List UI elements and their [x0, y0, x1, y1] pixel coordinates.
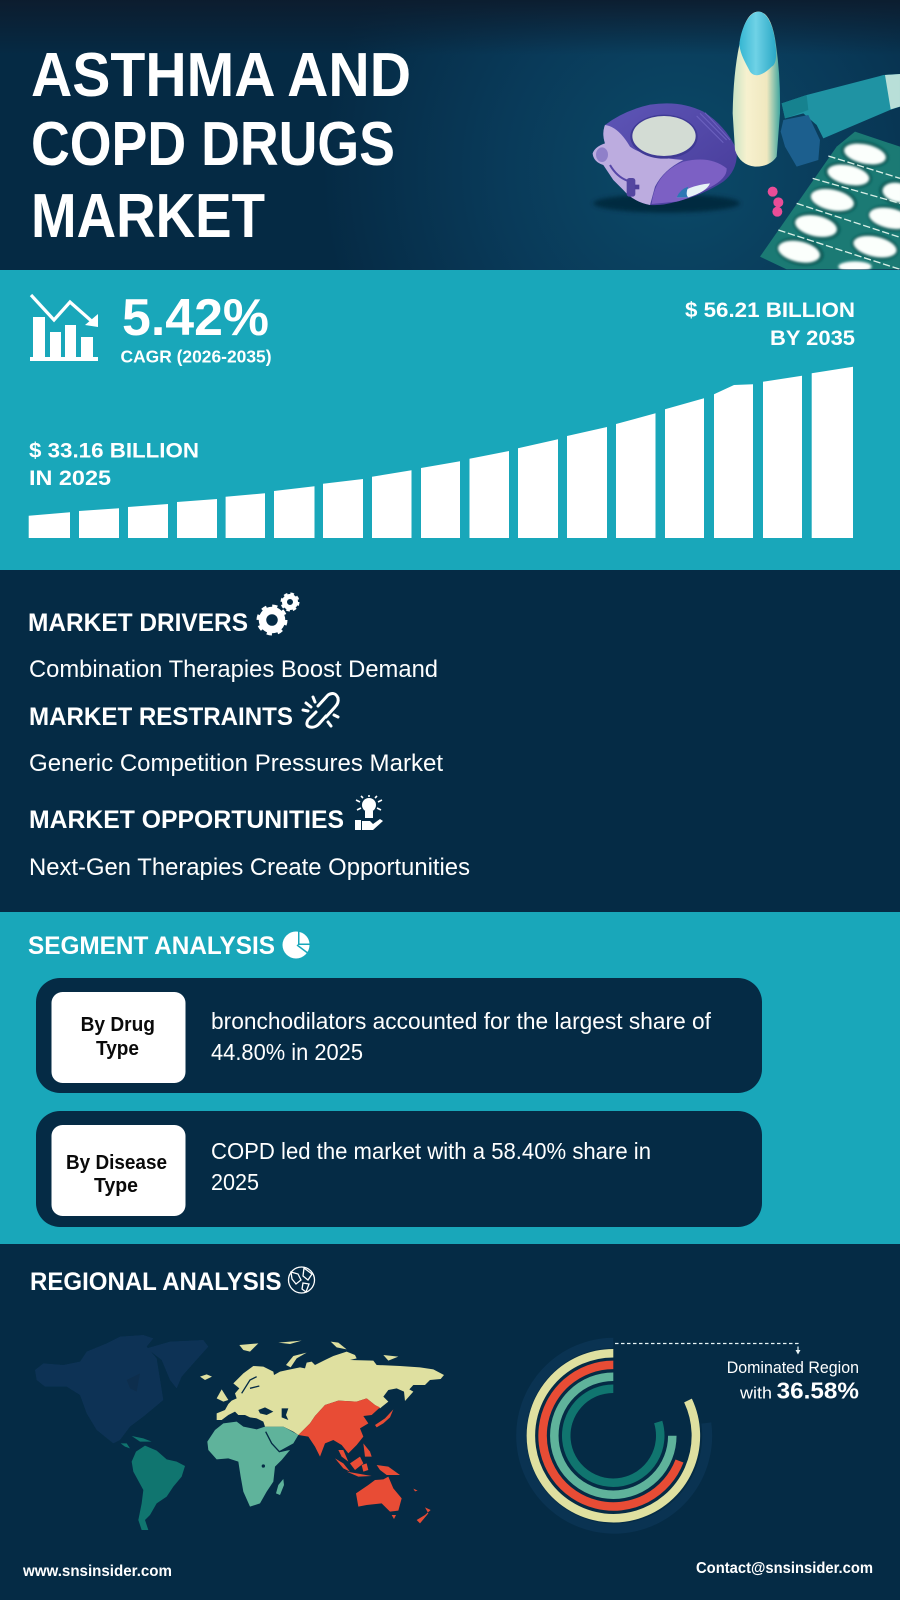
callout: dominated region: Dominated Region	[727, 1359, 859, 1377]
driver text: Combination Therapies Boost Demand	[29, 656, 438, 683]
panel: market size	[0, 270, 900, 570]
yellow arc	[531, 1353, 696, 1518]
restraint text: Generic Competition Pressures Market	[29, 750, 443, 777]
region: europe and russia	[200, 1341, 444, 1435]
region: north america	[35, 1335, 208, 1443]
card: by drug type: 44.80% in 2025	[211, 1039, 363, 1065]
card: by disease type: By Disease	[66, 1152, 167, 1174]
CAGR label: CAGR (2026-2035)	[120, 346, 272, 366]
card: by disease type	[36, 1111, 762, 1227]
teal arc	[566, 1389, 660, 1483]
card: by drug type: bronchodilators accounted for the largest share of	[211, 1008, 712, 1034]
header photo: inhalers and blister pack	[593, 12, 900, 272]
footer: contact: Contact@snsinsider.com	[696, 1560, 873, 1577]
end value: BY 2035	[770, 326, 855, 350]
title: MARKET	[31, 182, 265, 251]
radial chart	[521, 1343, 707, 1529]
CAGR value: 5.42%	[122, 289, 269, 347]
green arc	[554, 1377, 672, 1495]
icon: pie chart	[282, 931, 310, 958]
red arc	[543, 1365, 680, 1506]
pink pills	[768, 187, 783, 217]
icon: idea in hand	[355, 795, 383, 830]
icon: globe	[288, 1267, 314, 1293]
title	[31, 41, 411, 251]
card: by disease type: 2025	[211, 1169, 259, 1195]
card: by drug type	[36, 978, 762, 1093]
disc inhaler	[593, 103, 740, 213]
end value	[685, 298, 855, 350]
callout: dominated region	[727, 1359, 859, 1404]
start value: $ 33.16 BILLION	[29, 438, 199, 462]
panel: market dynamics	[0, 570, 900, 912]
icon: gears	[258, 594, 298, 634]
heading: market restraints: MARKET RESTRAINTS	[29, 703, 293, 731]
icon: CAGR chart	[30, 295, 98, 361]
start value: IN 2025	[29, 466, 111, 490]
tall inhaler bottle	[733, 12, 780, 167]
icon: broken chain	[303, 694, 338, 727]
start value	[29, 438, 199, 490]
region: southeast asia and oceania	[335, 1443, 431, 1523]
teal metered inhaler	[781, 74, 900, 167]
region: africa and middle east	[207, 1422, 298, 1507]
panel: regional analysis	[0, 1244, 900, 1600]
world map	[35, 1335, 444, 1530]
card: by drug type: Type	[96, 1038, 139, 1060]
title: COPD DRUGS	[31, 110, 395, 179]
callout: dominated region: with	[739, 1384, 772, 1402]
title: ASTHMA AND	[31, 41, 411, 110]
opportunity text: Next-Gen Therapies Create Opportunities	[29, 854, 470, 881]
heading: market drivers: MARKET DRIVERS	[28, 609, 248, 637]
card: by drug type: By Drug	[81, 1014, 155, 1036]
callout: dominated region: 36.58%	[777, 1378, 859, 1404]
card: by disease type: COPD led the market with a 58.40% share in	[211, 1138, 651, 1164]
heading: segment analysis: SEGMENT ANALYSIS	[28, 932, 275, 960]
blister pack	[760, 132, 900, 272]
heading: regional analysis: REGIONAL ANALYSIS	[30, 1268, 282, 1296]
halo arc	[521, 1343, 707, 1529]
footer: website: www.snsinsider.com	[22, 1563, 172, 1580]
region: asia	[298, 1398, 393, 1457]
end value: $ 56.21 BILLION	[685, 298, 855, 322]
card: by disease type: Type	[94, 1175, 138, 1197]
panel: segment analysis	[0, 912, 900, 1244]
dashed callout arrow	[615, 1344, 800, 1354]
panel: header	[0, 0, 900, 272]
region: south america	[121, 1436, 185, 1530]
bar chart	[29, 367, 853, 538]
heading: market opportunities: MARKET OPPORTUNITIES	[29, 806, 344, 834]
